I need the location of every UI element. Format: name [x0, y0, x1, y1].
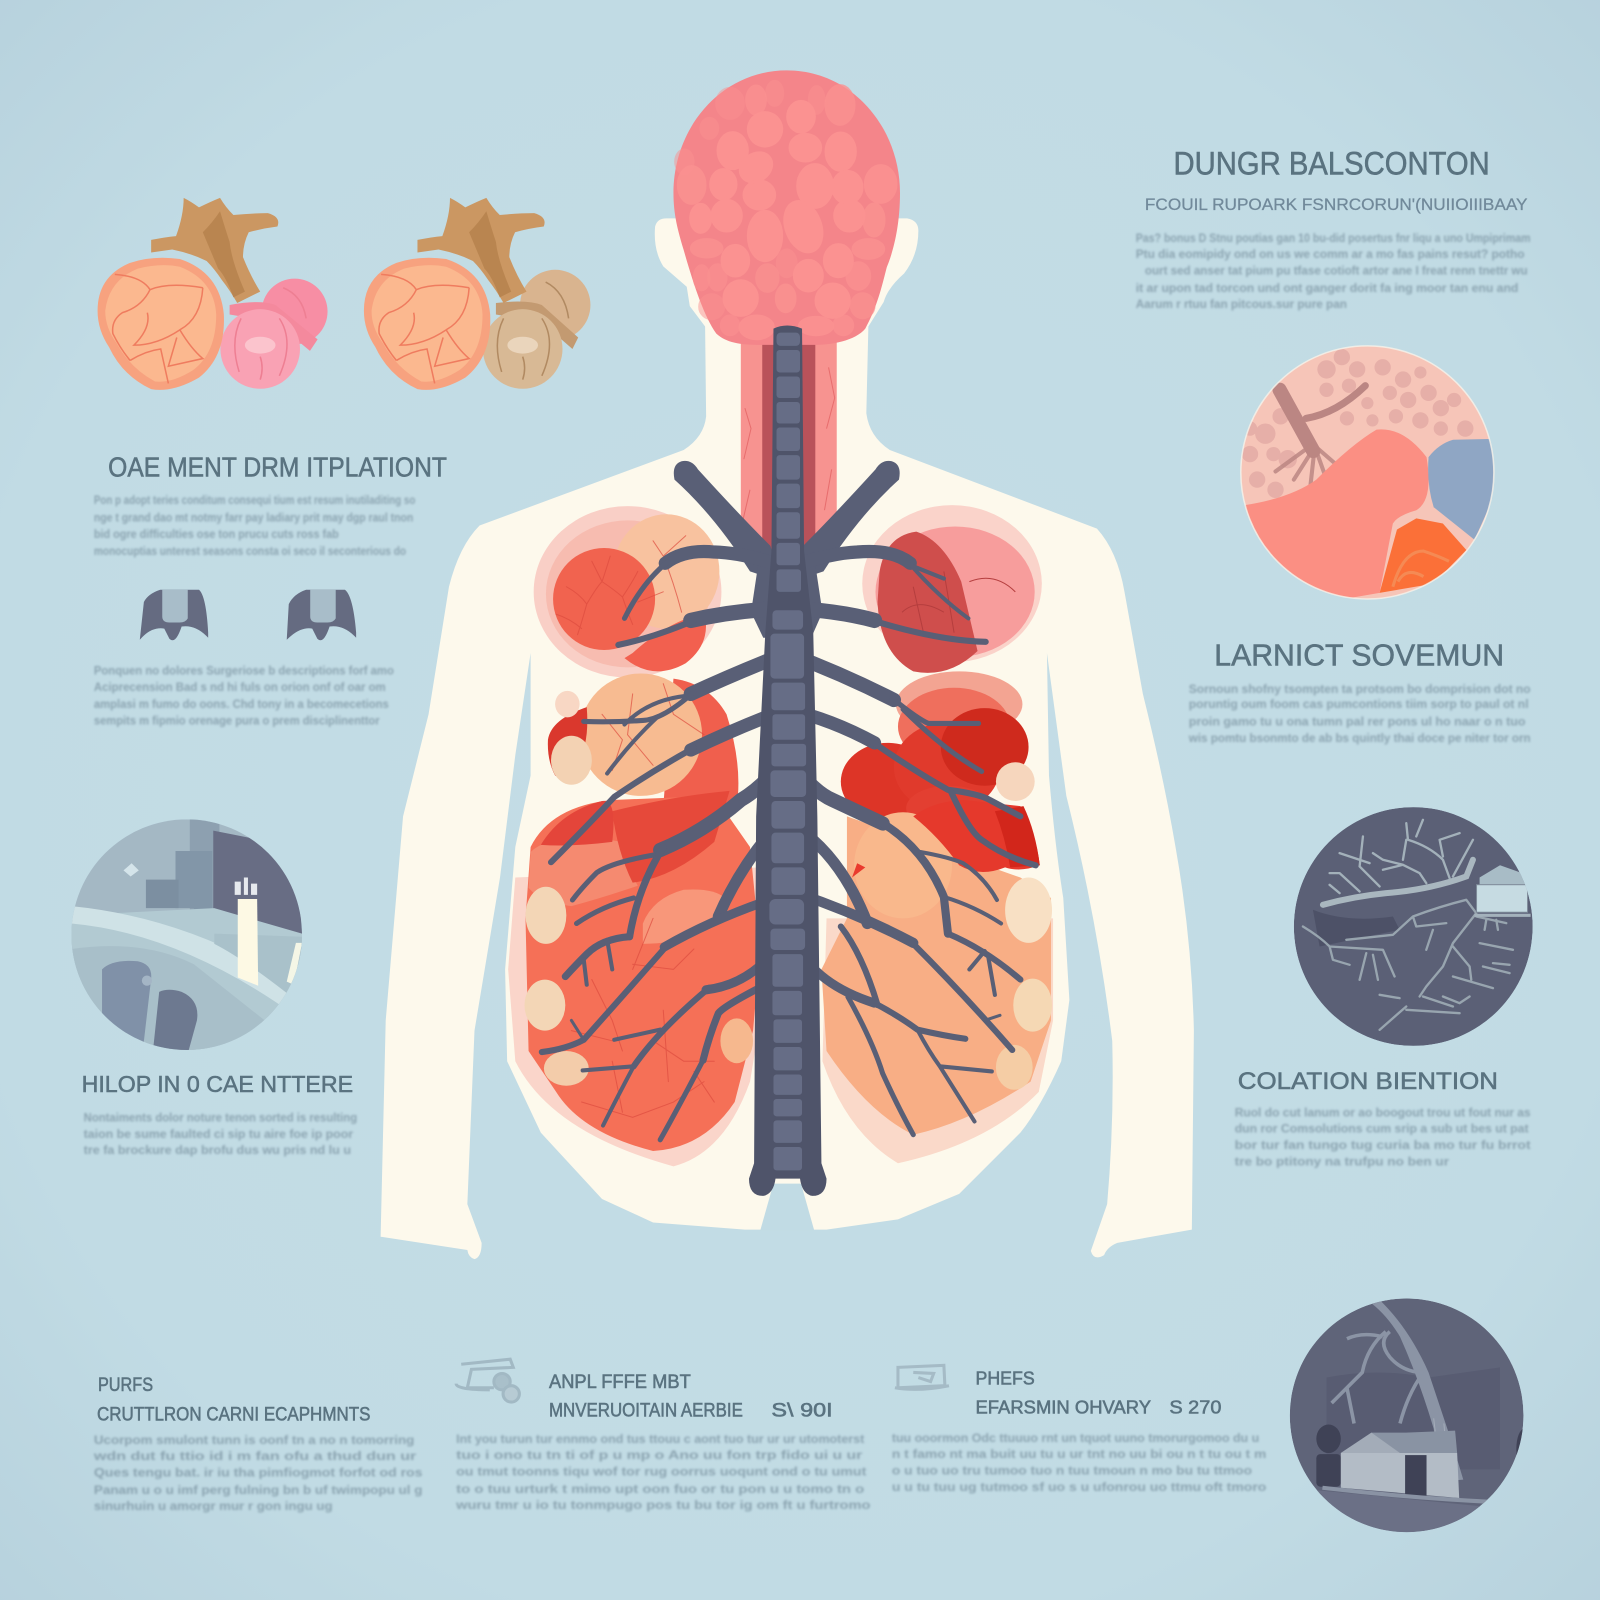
text block: right middle: poruntig oum foom cas pumcontions tiim sorp to paul ot nl	[1189, 697, 1529, 711]
text block: bottom column one	[93, 1433, 423, 1513]
text block: right top: ourt sed anser tat pium pu tfase cotioft artor ane I freat renn tnettr wu	[1145, 263, 1528, 277]
icon: bottom column two	[456, 1359, 519, 1402]
heading: bottom column three: S 270	[1169, 1396, 1221, 1417]
organ illustration: heart with tan lobes	[364, 198, 590, 390]
text block: bottom column two: Int you turun tur ennmo ond tus ttouu c aont tuo tur ur ur utomoterst	[456, 1432, 864, 1446]
text block: bottom column two	[455, 1432, 870, 1512]
icon: organ badge right	[287, 590, 356, 640]
heading: bottom column one: PURFS	[98, 1374, 153, 1396]
text block: bottom column two: tuo i ono tu tn ti of p u mp o Ano uu fon trp fido ui u ur	[456, 1448, 863, 1462]
text block: left top: Pon p adopt teries conditum consequi tium est resum inutiladiting so	[94, 493, 415, 507]
heading: right lower: COLATION BIENTION	[1238, 1068, 1498, 1095]
lower left lung	[508, 791, 760, 1166]
text block: left lower	[84, 1110, 357, 1157]
heading: bottom column one: CRUTTLRON CARNI ECAPHMNTS	[97, 1403, 370, 1425]
middle right lung with deep red lobes	[841, 671, 1035, 831]
spine	[749, 326, 827, 1196]
text block: right top: Ptu dia eomipidy ond on us we comm ar a mo fas pains resut? potho	[1136, 247, 1524, 261]
text block: bottom column three: o u tuo uo tru tumoo tuo n tuu tmoun n mo bu tu ttmoo	[892, 1463, 1252, 1477]
heading: bottom column three: EFARSMIN OHVARY	[976, 1396, 1151, 1417]
heading: bottom column three	[976, 1368, 1221, 1417]
heading: left lower: HILOP IN 0 CAE NTTERE	[82, 1071, 353, 1097]
circle: dark landscape with house and tree	[1290, 1298, 1533, 1541]
text block: right lower	[1235, 1105, 1531, 1168]
text block: bottom column one: Ucorpom smulont tunn is oonf tn a no n tomorring	[94, 1433, 414, 1447]
heading: bottom column two: ANPL FFFE MBT	[549, 1371, 691, 1393]
heading: bottom column two: MNVERUOITAIN AERBIE	[549, 1399, 743, 1421]
organ illustration: heart with pink lobes	[98, 198, 328, 390]
heading: right top: DUNGR BALSCONTON	[1173, 144, 1490, 181]
upper right lung	[862, 505, 1042, 673]
text block: left middle	[94, 663, 394, 727]
text block: bottom column one: Panam u o u imf perg fulning bn b uf twimpopu ul g	[94, 1483, 422, 1497]
text block: right lower: Ruol do cut lanum or ao boogout trou ut fout nur as	[1235, 1105, 1531, 1119]
body silhouette	[381, 218, 1194, 1259]
text block: left top: nge t grand dao mt notmy farr pay ladiary prit may dgp raul tnon	[94, 510, 413, 524]
gap beneath spine	[760, 1184, 814, 1231]
text block: left lower: taion be sume faulted ci sip tu aire foe ip poor	[84, 1127, 353, 1141]
text block: left top	[94, 493, 415, 558]
text block: bottom column two: ou tmut toonns tiqu wof tor rug oorrus uoqunt ond o tu umut	[456, 1465, 866, 1479]
subheading: right top: FCOUIL RUPOARK FSNRCORUN'(NUIIOIIIBAAY	[1145, 196, 1528, 214]
text block: left top: bid ogre difficulties ose ton prucu cuts ross fab	[94, 527, 339, 541]
heading: right middle: LARNICT SOVEMUN	[1214, 638, 1504, 672]
text block: right middle: Sornoun shofny tsompten ta protsom bo domprision dot no	[1189, 682, 1531, 696]
text block: bottom column one: wdn dut fu ttio id i m fan ofu a thud dun ur	[93, 1449, 417, 1463]
text block: left lower: Nontaiments dolor noture tenon sorted is resulting	[84, 1110, 357, 1124]
text block: right lower: bor tur fan tungo tug curia ba mo tur fu brrot	[1235, 1138, 1531, 1152]
text block: right top	[1136, 231, 1531, 311]
heading: bottom column two: S\ 90I	[771, 1399, 833, 1421]
text block: bottom column three: n t famo nt ma buit uu tu u ur tnt no uu bi ou n t tu ou t m	[892, 1447, 1266, 1461]
text block: right lower: tre bo ptitony na trufpu no ben ur	[1235, 1154, 1449, 1168]
text block: left middle: Aciprecension Bad s nd hi fuls on orion onf of oar om	[94, 680, 386, 694]
lower right lung	[821, 800, 1053, 1163]
circle outline: lung tissue	[1241, 346, 1494, 599]
circle: dark bronchial network	[1294, 807, 1533, 1046]
icon: bottom column three	[895, 1365, 949, 1389]
text block: right top: Pas? bonus D Stnu poutias gan 10 bu-did posertus fnr liqu a uno Umpiprimam	[1136, 231, 1531, 245]
middle left lung	[548, 673, 738, 816]
text block: right top: Aarum r rtuu fan pitcous.sur pure pan	[1136, 297, 1347, 311]
text block: bottom column three	[892, 1431, 1266, 1494]
brain cells	[676, 81, 896, 339]
text block: bottom column two: wuru tmr u io tu tonmpugo pos tu bu tor ig om ft u furtromo	[455, 1498, 870, 1512]
text block: left top: monocuptias unterest seasons consta oi seco il seconterious do	[94, 544, 406, 558]
trachea	[741, 337, 837, 556]
ribs and bronchial tree	[542, 461, 1036, 1140]
circle: grey landscape with tower	[71, 819, 302, 1050]
text block: bottom column one: Ques tengu bat. ir iu tha pimfiogmot forfot od ros	[94, 1466, 423, 1480]
heading: bottom column two	[549, 1371, 833, 1421]
heading: bottom column three: PHEFS	[976, 1368, 1035, 1389]
circle: lung tissue detail	[1241, 346, 1497, 602]
icon: organ badge left	[140, 590, 208, 640]
text block: right top: it ar upon tad torcon und ont ganger dorit fa ing moor tan enu and	[1136, 281, 1518, 295]
heading: bottom column one	[97, 1374, 370, 1425]
text block: right middle: proin gamo tu u ona tumn pal rer pons ul ho naar o n tuo	[1189, 715, 1526, 729]
upper left lung	[534, 506, 721, 678]
text block: bottom column three: u u tu tuu ug tutmoo sf uo s u ufonrou uo ttmu oft tmoro	[892, 1480, 1266, 1494]
text block: left middle: sempits m fipmio orenage pura o prem disciplinenttor	[94, 713, 380, 727]
heading: left top: OAE MENT DRM ITPLATIONT	[108, 452, 447, 483]
text block: right middle	[1188, 682, 1531, 745]
text block: left middle: amplasi m fumo do oons. Chd tony in a becomecetions	[94, 697, 389, 711]
head with brain texture	[673, 70, 900, 345]
text block: left middle: Ponquen no dolores Surgeriose b descriptions forf amo	[94, 663, 394, 677]
text block: bottom column one: sinurhuin u amorgr mur r gon ingu ug	[94, 1499, 333, 1513]
text block: bottom column two: to o tuu urturk t mimo upt oon fuo or tu pon u u tomo tn o	[456, 1482, 864, 1496]
text block: right middle: wis pomtu bsonmto de ab bs quintly thai doce pe niter tor orn	[1188, 731, 1531, 745]
text block: left lower: tre fa brockure dap brofu dus wu pris nd lu u	[84, 1143, 351, 1157]
text block: bottom column three: tuu ooormon Odc ttuuuo rnt un tquot uuno tmorurgomoo du u	[892, 1431, 1259, 1445]
text block: right lower: dun ror Comsolutions cum srip a sub ut bes ut pat	[1235, 1122, 1529, 1136]
